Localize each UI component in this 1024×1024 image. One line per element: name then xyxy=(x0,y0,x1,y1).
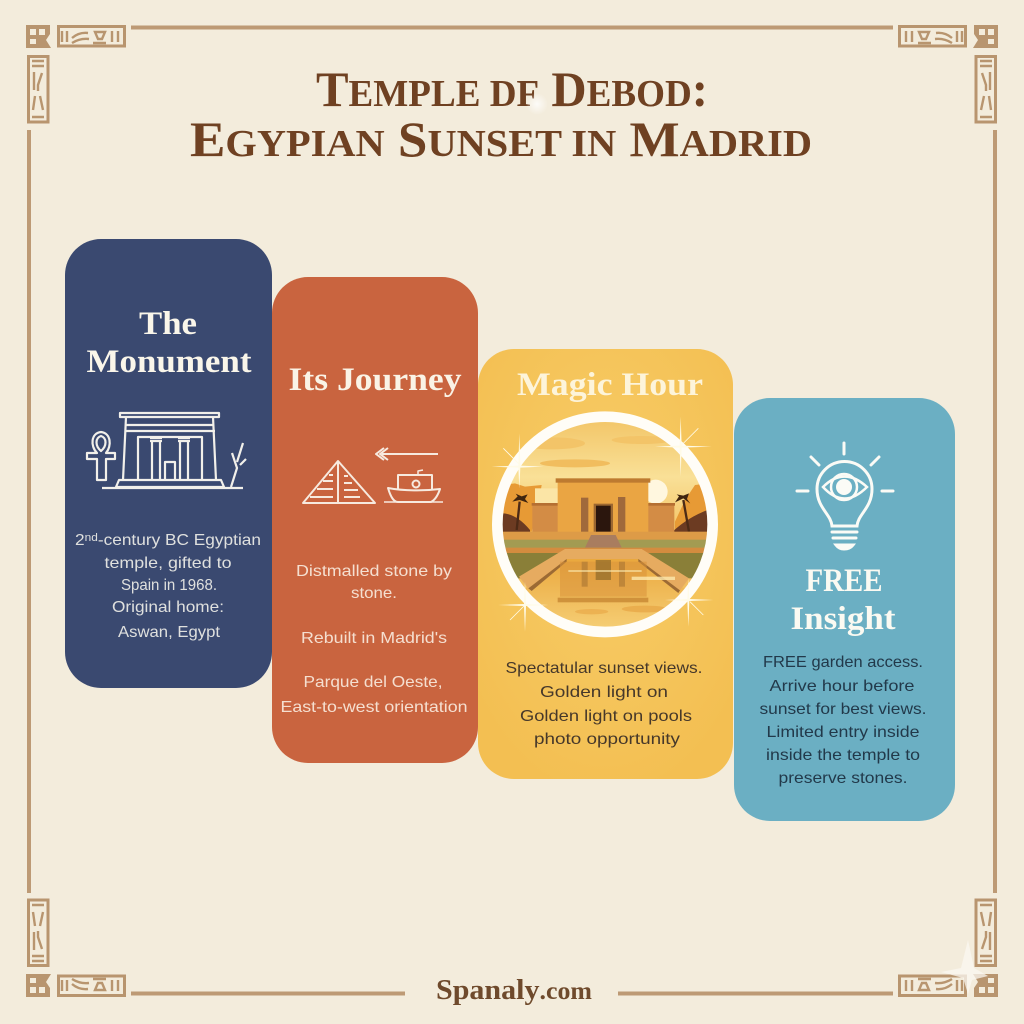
panel: The Monument xyxy=(65,239,272,688)
icon: temple with ankh and plant xyxy=(87,413,246,488)
panel: Magic Hour xyxy=(478,349,733,779)
panel: FREE Insight xyxy=(734,398,955,821)
text: monument description: Original home: xyxy=(112,599,224,616)
title: TEMPLE DF DEBOD: xyxy=(316,61,708,117)
text: insight description: inside the temple to xyxy=(766,747,920,764)
text: insight description: preserve stones. xyxy=(778,770,908,787)
text: monument description: Aswan, Egypt xyxy=(118,624,221,641)
text: monument description: -century BC Egyptian xyxy=(98,532,261,549)
heading: The Monument: Monument xyxy=(86,344,252,380)
text: journey description xyxy=(280,563,468,716)
footer brand: Spanaly.com xyxy=(436,974,592,1006)
text: journey description: Rebuilt in Madrid's xyxy=(301,630,447,647)
text: magic hour description: Golden light on pools xyxy=(520,708,692,725)
text: monument description xyxy=(75,532,261,641)
text: magic hour description: Spectatular sunset views. xyxy=(506,660,702,677)
icon: light bulb with eye xyxy=(797,443,893,549)
title: EGYPIAN SUNSET IN MADRID xyxy=(190,111,812,167)
text: monument description: temple, gifted to xyxy=(104,555,232,572)
text: journey description: East-to-west orientation xyxy=(280,699,468,716)
heading: The Monument xyxy=(86,306,252,380)
title xyxy=(190,61,812,167)
panel: Its Journey xyxy=(272,277,478,763)
text: journey description: Distmalled stone by xyxy=(296,563,452,580)
heading: The Monument: The xyxy=(139,306,197,342)
text: insight description xyxy=(760,654,926,787)
text: monument description: Spain in 1968. xyxy=(121,577,217,594)
text: monument description: nd xyxy=(85,532,98,544)
heading: Its Journey: Its Journey xyxy=(288,362,462,398)
text: insight description: Limited entry inside xyxy=(766,724,920,741)
text: magic hour description: photo opportunity xyxy=(534,731,680,748)
text: insight description: FREE garden access. xyxy=(763,654,923,671)
text: magic hour description: Golden light on xyxy=(540,684,668,701)
text: journey description: stone. xyxy=(351,585,397,602)
heading: FREE Insight xyxy=(790,563,896,637)
text: journey description: Parque del Oeste, xyxy=(304,674,442,691)
icon: pyramid and boat with arrow xyxy=(303,448,443,503)
heading: Magic Hour: Magic Hour xyxy=(517,367,703,403)
heading: FREE Insight: FREE xyxy=(806,563,882,599)
text: monument description: 2 xyxy=(75,532,84,549)
heading: FREE Insight: Insight xyxy=(790,601,896,637)
illustration: temple at sunset xyxy=(492,411,718,638)
sparkles xyxy=(492,417,713,632)
text: insight description: sunset for best views. xyxy=(760,701,926,718)
text: insight description: Arrive hour before xyxy=(770,678,915,695)
text: magic hour description xyxy=(506,660,702,748)
